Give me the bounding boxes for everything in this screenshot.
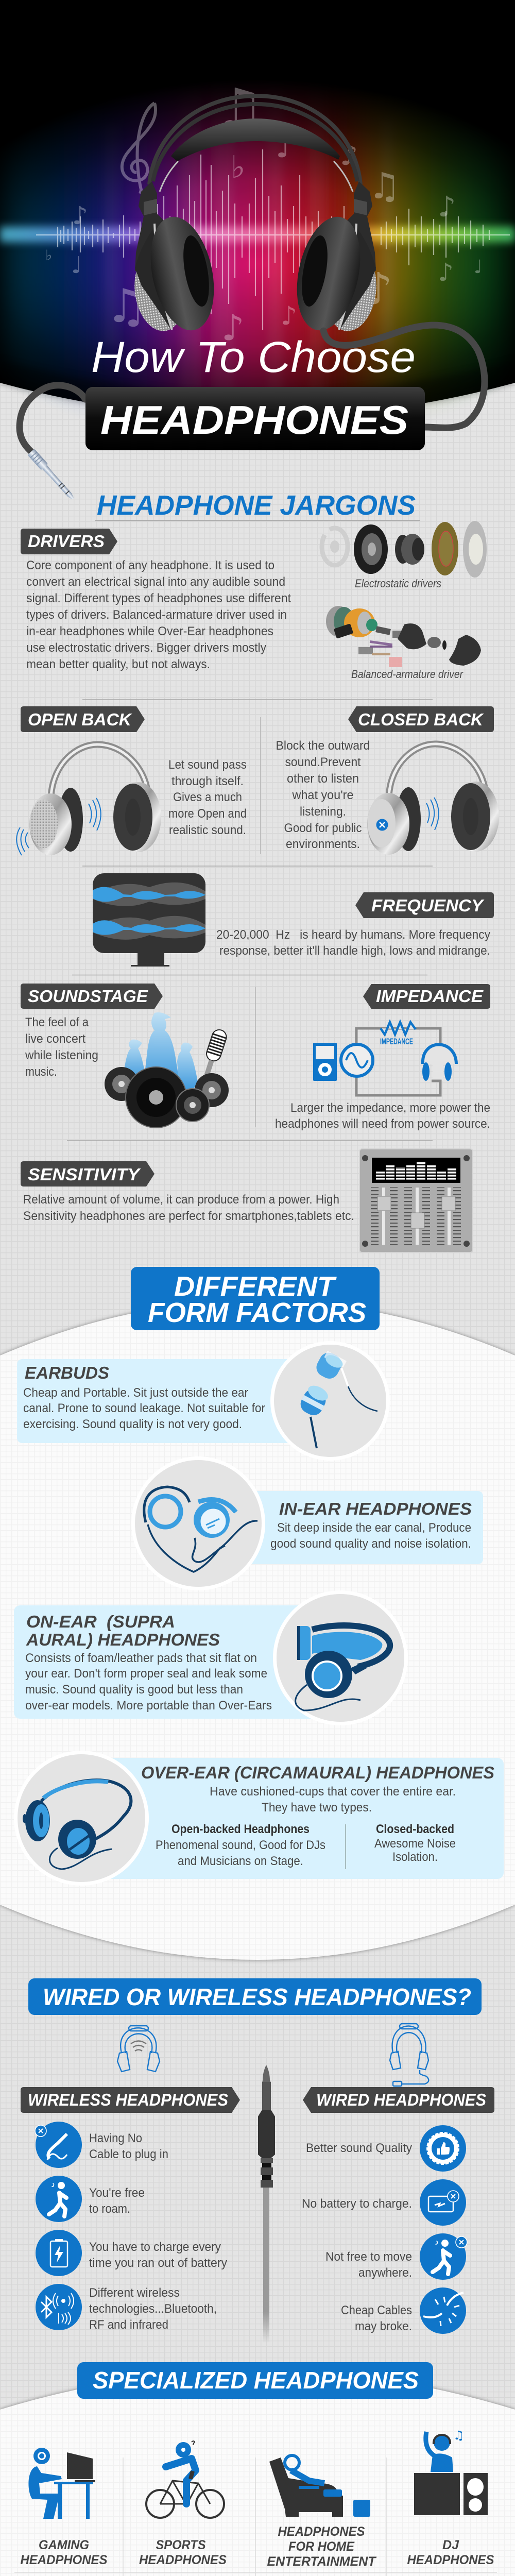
text: open back: Let sound pass xyxy=(168,758,247,772)
heading: headphone jargons: HEADPHONE JARGONS xyxy=(97,490,416,521)
text: open back: Gives a much xyxy=(173,790,242,804)
item: wireless technologies: technologies...Bluetooth, xyxy=(89,2302,217,2316)
icon: gamer at desk xyxy=(28,2448,95,2519)
card: over-ear headphones: They have two types. xyxy=(262,1801,372,1815)
tag: drivers: DRIVERS xyxy=(28,532,105,551)
header banner xyxy=(0,0,515,418)
item: cheap cables: Cheap Cables xyxy=(341,2303,412,2317)
item: wireless technologies: RF and infrared xyxy=(89,2318,168,2332)
item: better sound xyxy=(306,2125,466,2172)
text: drivers: mean better quality, but not always. xyxy=(26,657,210,671)
card: over-ear headphones: OVER-EAR (CIRCAMAURAL) HEADPHONES xyxy=(141,1763,494,1782)
icon: balanced-armature parts xyxy=(326,606,481,667)
card: in-ear headphones: IN-EAR HEADPHONES xyxy=(279,1499,472,1518)
icon: audio plug divider xyxy=(258,2065,275,2343)
tag: impedance: IMPEDANCE xyxy=(376,987,484,1006)
tag: wireless: WIRELESS HEADPHONES xyxy=(28,2090,228,2109)
item: no battery xyxy=(302,2179,466,2226)
card: in-ear headphones: good sound quality and noise isolation. xyxy=(270,1537,471,1551)
title box xyxy=(85,387,425,450)
title xyxy=(85,333,425,450)
icon: dj with speakers xyxy=(414,2428,488,2515)
item: no battery: No battery to charge. xyxy=(302,2197,412,2211)
music notes xyxy=(45,76,483,349)
item: not free: anywhere. xyxy=(358,2266,412,2280)
card: on-ear headphones xyxy=(14,1590,408,1725)
diagram: impedance circuit: IMPEDANCE xyxy=(380,1037,413,1046)
jack plug xyxy=(27,449,77,502)
icon: over-ear headphones xyxy=(14,1751,149,1886)
card: over-ear headphones: Closed-backed xyxy=(376,1822,454,1836)
item: free to roam: to roam. xyxy=(89,2202,130,2216)
tag: sensitivity xyxy=(21,1161,154,1187)
icon: earbuds xyxy=(270,1341,390,1461)
text: closed back xyxy=(276,739,370,851)
item: no cable: Having No xyxy=(89,2131,142,2145)
card: on-ear headphones: ON-EAR (SUPRA xyxy=(26,1612,175,1631)
panel: form factors section xyxy=(0,1267,515,1960)
music notes: ♪ xyxy=(281,301,297,331)
music notes: ♪ xyxy=(276,129,295,165)
card: earbuds: exercising. Sound quality is not very good. xyxy=(23,1417,242,1431)
cable xyxy=(20,325,485,451)
tag: frequency: FREQUENCY xyxy=(371,896,485,915)
music notes: ♪ xyxy=(438,190,456,223)
item: free to roam: You're free xyxy=(89,2186,145,2200)
item: wireless technologies: Different wireless xyxy=(89,2286,180,2300)
text: home entertainment: FOR HOME xyxy=(288,2539,355,2554)
text: open back: through itself. xyxy=(171,774,244,788)
icon: dj with speakers: ♫ xyxy=(453,2428,465,2443)
music notes: ♩ xyxy=(474,257,483,278)
text: soundstage xyxy=(25,1015,98,1079)
text: impedance xyxy=(275,1101,490,1131)
text: closed back: sound.Prevent xyxy=(285,755,361,769)
column: wireless headphones xyxy=(21,2087,240,2332)
tag: soundstage xyxy=(21,984,163,1009)
card: over-ear headphones: Awesome Noise xyxy=(374,1837,456,1851)
icon: electrostatic driver parts xyxy=(322,521,487,578)
heading: specialized headphones xyxy=(77,2362,433,2399)
text: home entertainment xyxy=(267,2524,377,2576)
text: soundstage: live concert xyxy=(25,1032,85,1046)
text: open back: realistic sound. xyxy=(169,823,246,837)
text: drivers: types of drivers. Balanced-armature driver used in xyxy=(26,608,287,622)
item: free to roam xyxy=(36,2176,145,2222)
icon: on-ear headphones xyxy=(273,1590,408,1725)
panel: open back xyxy=(16,706,247,855)
music notes: ♪ xyxy=(72,201,88,230)
card: over-ear headphones: Isolation. xyxy=(392,1850,438,1864)
text: open back xyxy=(168,758,247,837)
text: sports: SPORTS xyxy=(156,2538,206,2552)
heading: different form factors: FORM FACTORS xyxy=(148,1297,366,1328)
item: better sound: Better sound Quality xyxy=(306,2141,412,2155)
text: sports xyxy=(134,2538,243,2576)
card: earbuds xyxy=(17,1341,390,1461)
card: over-ear headphones: Open-backed Headphones xyxy=(171,1822,310,1836)
text: impedance: Larger the impedance, more power the xyxy=(290,1101,490,1115)
card: earbuds: canal. Prone to sound leakage. Not suitable for xyxy=(23,1401,265,1415)
heading: specialized headphones: SPECIALIZED HEADPHONES xyxy=(93,2367,419,2394)
text: frequency: 20-20,000 Hz is heard by humans. More frequency xyxy=(216,928,490,942)
text: frequency xyxy=(216,928,490,958)
waveform xyxy=(36,149,510,330)
card: on-ear headphones: your ear. Don't form proper seal and leak some xyxy=(25,1667,267,1681)
music notes: ♪ xyxy=(340,139,358,172)
text: home entertainment: HEADPHONES xyxy=(278,2524,365,2539)
music notes: ♪ xyxy=(438,258,454,287)
item: charging xyxy=(36,2230,227,2276)
diagram: impedance circuit xyxy=(313,1022,456,1095)
headphones illustration xyxy=(130,96,381,336)
text: soundstage: The feel of a xyxy=(25,1015,89,1029)
tag: wired xyxy=(303,2087,494,2113)
text: drivers: Core component of any headphone. It is used to xyxy=(26,558,274,572)
icon: in-ear headphones xyxy=(131,1456,265,1590)
music notes: ♪ xyxy=(365,264,392,315)
tag: drivers xyxy=(21,529,117,554)
white dome background xyxy=(0,1300,515,1960)
icon: cyclist xyxy=(146,2441,224,2518)
text: dj: HEADPHONES xyxy=(407,2553,494,2567)
card: on-ear headphones: AURAL) HEADPHONES xyxy=(26,1630,220,1649)
text: sensitivity xyxy=(23,1193,354,1223)
music notes: ♫ xyxy=(106,279,147,333)
text: sensitivity: Relative amount of volume, it can produce from a power. High xyxy=(23,1193,339,1207)
text: closed back: other to listen xyxy=(287,772,359,786)
text: open back: more Open and xyxy=(168,807,247,821)
panel: wired or wireless xyxy=(21,1978,494,2343)
text: drivers: use electrostatic drivers. Bigger drivers mostly xyxy=(26,641,266,655)
panel: frequency xyxy=(93,873,494,967)
illustration: closed-back headphones xyxy=(367,744,499,855)
panel: specialized headphones xyxy=(0,2362,515,2576)
card: in-ear headphones: Sit deep inside the ear canal, Produce xyxy=(277,1521,471,1535)
text: drivers: in-ear headphones while Over-Ear headphones xyxy=(26,624,273,638)
tag: closed back: CLOSED BACK xyxy=(358,710,484,729)
icon: armchair and ottoman xyxy=(269,2455,370,2517)
music notes: ♪ xyxy=(221,307,245,349)
heading: different form factors xyxy=(131,1267,380,1330)
title: How To Choose xyxy=(91,333,416,381)
text: soundstage: while listening xyxy=(25,1048,98,1062)
card: over-ear headphones: Phenomenal sound, Good for DJs xyxy=(156,1838,325,1852)
panel: sensitivity xyxy=(21,1149,473,1252)
text: closed back: Block the outward xyxy=(276,739,370,753)
tag: soundstage: SOUNDSTAGE xyxy=(28,987,148,1006)
card: on-ear headphones: Consists of foam/leather pads that sit flat on xyxy=(25,1651,257,1665)
item: not free xyxy=(325,2233,467,2280)
panel: closed back xyxy=(276,706,499,855)
text: gaming: GAMING xyxy=(39,2538,89,2552)
text: closed back: listening. xyxy=(300,805,346,819)
text: dj: DJ xyxy=(442,2538,459,2552)
music notes: ♫ xyxy=(368,165,401,207)
card: in-ear headphones xyxy=(131,1456,483,1590)
panel: drivers xyxy=(21,521,487,681)
panel: impedance xyxy=(275,984,490,1131)
item: no cable: Cable to plug in xyxy=(89,2147,168,2161)
card: on-ear headphones: over-ear models. More portable than Over-Ears xyxy=(25,1699,272,1713)
icon: audio mixer xyxy=(359,1149,473,1252)
card: over-ear headphones: Have cushioned-cups that cover the entire ear. xyxy=(210,1785,456,1799)
tag: closed back xyxy=(348,706,494,732)
tag: wired: WIRED HEADPHONES xyxy=(316,2090,486,2109)
column: home entertainment xyxy=(267,2455,377,2576)
card: earbuds: EARBUDS xyxy=(25,1363,109,1382)
music notes: ♭ xyxy=(231,149,245,185)
card: earbuds: Cheap and Portable. Sit just outside the ear xyxy=(23,1386,248,1400)
icon: monitor with waveform xyxy=(93,873,205,967)
column: gaming xyxy=(15,2448,116,2576)
text: closed back: Good for public xyxy=(284,821,362,835)
item: not free: Not free to move xyxy=(325,2250,412,2264)
caption: balanced-armature driver: Balanced-armature driver xyxy=(351,668,464,681)
panel: soundstage xyxy=(21,984,229,1128)
tag: sensitivity: SENSITIVITY xyxy=(28,1165,141,1184)
item: charging: time you ran out of battery xyxy=(89,2256,227,2270)
text: soundstage: music. xyxy=(25,1065,57,1079)
music notes: ♭ xyxy=(45,247,52,264)
text: frequency: response, better it'll handle high, lows and midrange. xyxy=(219,944,490,958)
column: wired headphones xyxy=(302,2087,494,2334)
caption: electrostatic drivers: Electrostatic drivers xyxy=(355,577,441,590)
text: gaming: HEADPHONES xyxy=(21,2553,108,2567)
item: cheap cables: may broke. xyxy=(355,2319,412,2333)
card: over-ear headphones: and Musicians on Stage. xyxy=(178,1854,303,1868)
text: drivers: convert an electrical signal into any audible sound xyxy=(26,575,285,589)
heading: wired or wireless: WIRED OR WIRELESS HEADPHONES? xyxy=(43,1984,471,2010)
title box: HEADPHONES xyxy=(100,397,408,443)
tag: frequency xyxy=(355,892,494,918)
heading: different form factors: DIFFERENT xyxy=(174,1271,337,1302)
text: home entertainment: ENTERTAINMENT xyxy=(267,2554,377,2569)
card: over-ear headphones xyxy=(14,1751,504,1886)
music notes: ♩ xyxy=(71,251,82,279)
item: cheap cables xyxy=(341,2287,466,2334)
column: dj xyxy=(407,2428,495,2576)
text: drivers xyxy=(26,558,291,671)
tag: open back: OPEN BACK xyxy=(28,710,132,729)
text: closed back: environments. xyxy=(286,837,360,851)
white dome background xyxy=(0,2370,515,2576)
item: charging: You have to charge every xyxy=(89,2240,221,2254)
text: drivers: signal. Different types of headphones use different xyxy=(26,591,291,605)
text: gaming xyxy=(15,2538,116,2576)
card: on-ear headphones: music. Sound quality is good but less than xyxy=(25,1683,243,1697)
item: wireless technologies xyxy=(36,2284,217,2332)
icon: wired headset outline xyxy=(390,2024,428,2086)
text: dj xyxy=(407,2538,495,2576)
item: no cable xyxy=(35,2122,168,2168)
text: sensitivity: Sensitivity headphones are perfect for smartphones,tablets etc. xyxy=(23,1209,354,1223)
tag: open back xyxy=(21,706,145,732)
column: sports xyxy=(134,2441,243,2576)
music notes: ♫ xyxy=(214,76,265,142)
illustration: crowd, microphone and speakers xyxy=(105,1012,229,1128)
illustration: open-back headphones xyxy=(16,744,161,855)
text: impedance: headphones will need from power source. xyxy=(275,1117,490,1131)
icon: wireless headset outline xyxy=(117,2026,160,2072)
tag: impedance xyxy=(363,984,490,1009)
text: sports: HEADPHONES xyxy=(139,2553,227,2567)
text: closed back: what you're xyxy=(292,788,353,802)
